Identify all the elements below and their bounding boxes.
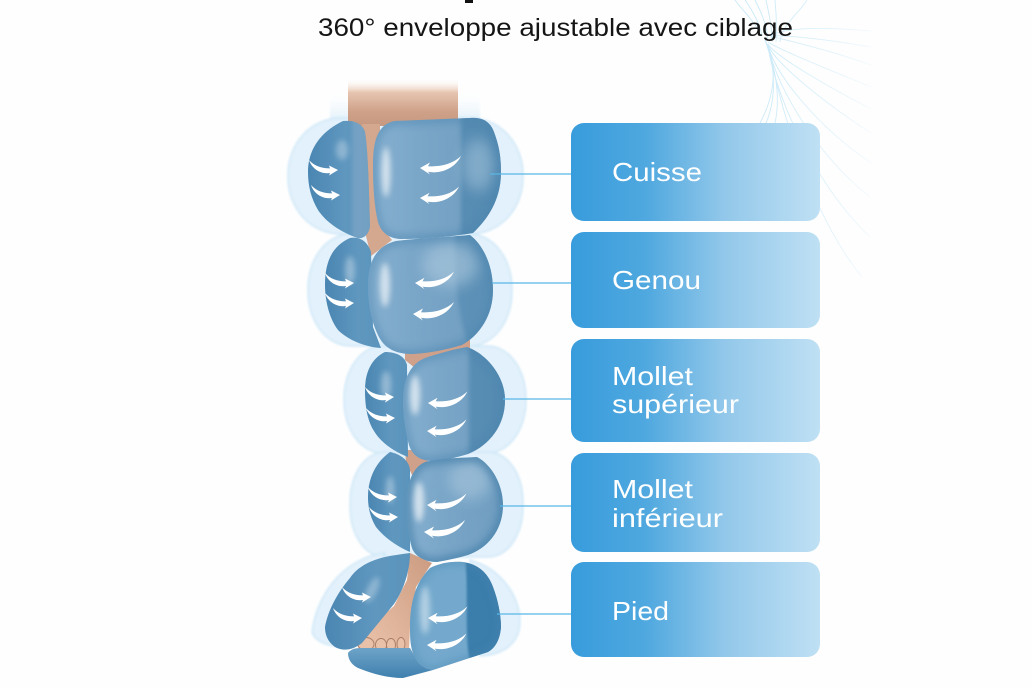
label: Genou: Genou xyxy=(612,265,701,295)
leg illustration xyxy=(288,78,526,678)
cropped heading descender xyxy=(465,0,473,3)
connector lines xyxy=(490,174,572,614)
infographic canvas xyxy=(286,0,871,678)
thigh chambers xyxy=(308,118,501,239)
lower calf chambers xyxy=(368,452,503,562)
label: Mollet supérieur: Mollet xyxy=(612,361,694,391)
toes xyxy=(358,638,405,652)
foot chambers and sole xyxy=(325,553,510,678)
label: Cuisse: Cuisse xyxy=(612,157,702,187)
label: Mollet inférieur: Mollet xyxy=(612,474,694,504)
label: Mollet inférieur: inférieur xyxy=(612,503,723,533)
upper calf chambers xyxy=(365,347,505,461)
label: Cuisse xyxy=(571,123,820,221)
label: Mollet inférieur xyxy=(571,453,820,552)
halos around the inflated chambers xyxy=(288,90,526,656)
label: Pied xyxy=(571,562,820,657)
foot xyxy=(358,553,432,652)
label: Mollet supérieur: supérieur xyxy=(612,389,739,419)
subtitle: 360° enveloppe ajustable avec ciblage xyxy=(318,14,793,42)
label: Mollet supérieur xyxy=(571,339,820,442)
decorative fan lines xyxy=(735,0,871,277)
label: Genou xyxy=(571,232,820,328)
label: Pied: Pied xyxy=(612,596,669,626)
bare leg xyxy=(348,78,470,475)
knee chambers xyxy=(325,230,500,354)
